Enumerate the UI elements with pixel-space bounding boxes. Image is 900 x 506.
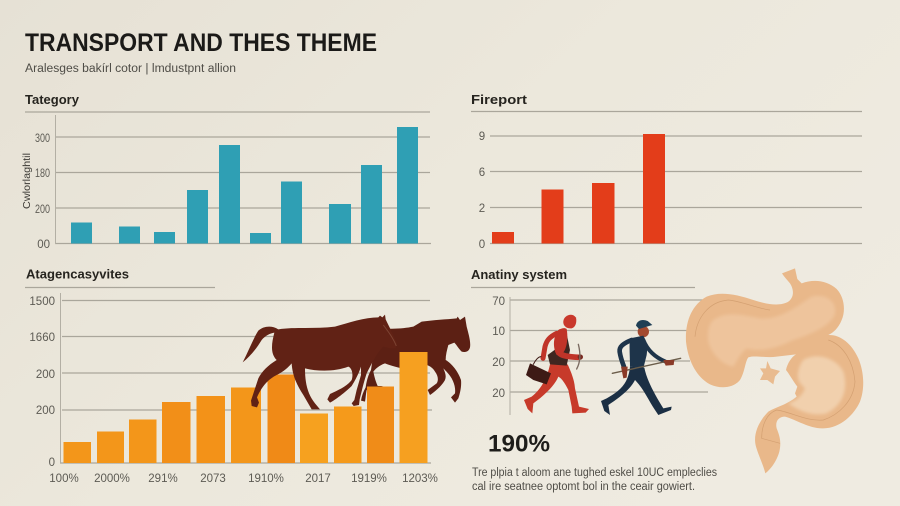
x axis labels: 2000% bbox=[94, 473, 130, 485]
x axis labels: 1910% bbox=[248, 473, 284, 485]
icon: rear horse bbox=[361, 317, 470, 403]
title: TRANSPORT AND THES THEME bbox=[25, 29, 377, 57]
description text: Tre plpia t aloom ane tughed eskel 10UC empleclies bbox=[472, 467, 717, 479]
x axis labels: 1919% bbox=[351, 473, 387, 485]
panel: fireport chart bbox=[471, 93, 862, 251]
stat: 190%: 190% bbox=[488, 430, 550, 458]
icon: navy runner bbox=[601, 320, 681, 415]
y axis labels: 0 bbox=[49, 457, 55, 469]
icon: stomach bbox=[686, 268, 863, 473]
y axis labels: 200 bbox=[36, 369, 55, 381]
description text: cal ire seatnee optomt bol in the ceair gowiert. bbox=[472, 481, 695, 493]
panel: agency chart bbox=[25, 268, 470, 485]
y axis labels: 2 bbox=[479, 203, 485, 215]
y axis labels: 20 bbox=[492, 388, 505, 400]
y axis labels: 180 bbox=[35, 168, 50, 180]
bars: red bbox=[492, 134, 665, 244]
y axis labels: 9 bbox=[479, 131, 485, 143]
y axis labels: 10 bbox=[492, 326, 505, 338]
y axis labels bbox=[492, 296, 505, 400]
y axis labels: 200 bbox=[35, 204, 50, 216]
y axis labels: 70 bbox=[492, 296, 505, 308]
icon: front horse bbox=[243, 315, 397, 409]
x axis labels: 291% bbox=[148, 473, 178, 485]
y axis labels bbox=[479, 131, 485, 251]
y axis labels: 300 bbox=[35, 133, 50, 145]
y axis labels bbox=[29, 296, 55, 469]
x axis labels bbox=[49, 473, 438, 485]
subtitle: Aralesges bakírl cotor | lmdustpnt allion bbox=[25, 63, 236, 75]
heading: fireport: Fireport bbox=[471, 93, 528, 107]
panel: category chart bbox=[21, 93, 431, 251]
y axis labels: 20 bbox=[492, 357, 505, 369]
icon: red runner bbox=[524, 315, 589, 413]
y axis labels: 1660 bbox=[29, 332, 55, 344]
panel: anatomy system bbox=[471, 268, 863, 493]
heading: category: Tategory bbox=[25, 93, 79, 107]
y axis title: Cwlorlaghtil bbox=[21, 153, 33, 209]
heading: agencies: Atagencasyvites bbox=[26, 268, 129, 282]
y axis labels: 0 bbox=[479, 239, 485, 251]
y axis labels: 1500 bbox=[29, 296, 55, 308]
bars: teal bbox=[71, 127, 418, 244]
y axis labels: 00 bbox=[37, 239, 50, 251]
x axis labels: 100% bbox=[49, 473, 79, 485]
x axis labels: 1203% bbox=[402, 473, 438, 485]
y axis labels bbox=[35, 133, 50, 251]
y axis labels: 200 bbox=[36, 405, 55, 417]
y axis labels: 6 bbox=[479, 167, 485, 179]
heading: anatomy system: Anatiny system bbox=[471, 268, 567, 282]
bars: orange bbox=[64, 352, 428, 463]
icon: small star shape bbox=[760, 361, 780, 384]
description text bbox=[472, 467, 717, 493]
x axis labels: 2073 bbox=[200, 473, 226, 485]
x axis labels: 2017 bbox=[305, 473, 331, 485]
